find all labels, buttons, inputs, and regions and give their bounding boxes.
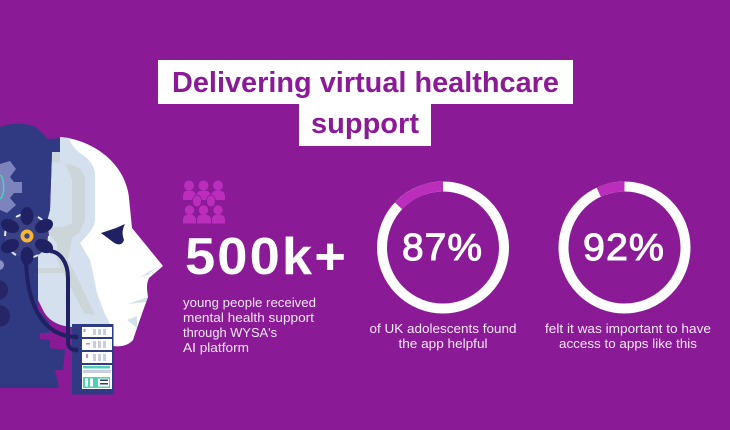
face shadow creases [127,267,157,328]
title: Delivering virtual healthcare [172,67,559,99]
title: support [311,108,419,140]
caption: felt it was important to have [545,321,711,336]
caption: access to apps like this [559,336,698,351]
description: through WYSA's [183,325,277,340]
description: AI platform [183,340,249,355]
head light blue shading [38,137,113,346]
gear teal ring [0,175,4,199]
stat: 87% donut [370,186,516,351]
percentage: 87% [402,227,483,269]
caption: of UK adolescents found [370,321,516,336]
caption: the app helpful [398,336,488,351]
stat: 92% donut [545,186,711,351]
percentage: 92% [583,227,665,269]
icon: gear [0,161,22,213]
big number: 500k+ [185,228,348,286]
donut ring [564,186,686,308]
side circles [0,260,10,327]
caption [545,321,711,351]
data panel device [72,324,114,394]
title [158,60,573,146]
stat: 500k+ young people [183,180,348,355]
stethoscope tubes [26,251,76,350]
icon: group of people [183,180,225,224]
robot head illustration [0,124,163,394]
description: young people received [183,295,316,310]
icon: eye [101,224,125,244]
description [183,295,316,355]
head white face [60,137,163,346]
robot dark back of head and neck [0,124,65,388]
description: mental health support [183,310,314,325]
head grey stripe [38,152,95,315]
donut ring [382,186,504,308]
icon: flower joint [0,207,55,265]
caption [370,321,516,351]
